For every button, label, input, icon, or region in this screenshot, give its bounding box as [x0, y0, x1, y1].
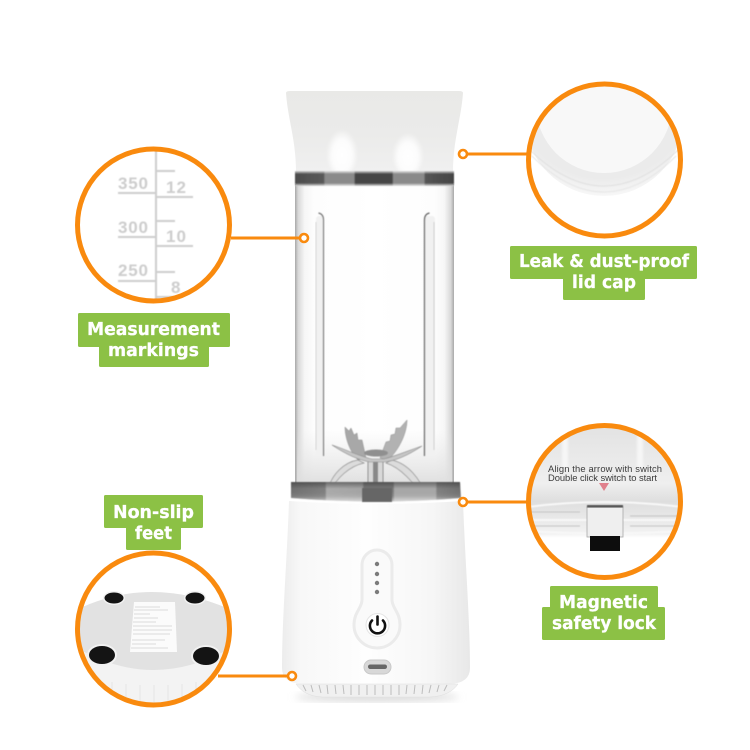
- control panel: [354, 550, 400, 648]
- label: measurement markings: Measurement: [87, 320, 220, 340]
- right jar rib: [424, 213, 435, 456]
- label: magnetic safety lock: Magnetic: [559, 593, 648, 613]
- blade assembly: [328, 420, 426, 496]
- measurement scale: 350: [118, 174, 148, 193]
- label: magnetic safety lock: [542, 586, 665, 640]
- foot bottom left: [88, 644, 117, 663]
- switch tile: [587, 507, 623, 537]
- battery dots: [375, 562, 379, 594]
- label: lid cap: Leak & dust-proof: [519, 252, 689, 272]
- measurement scale: 8: [171, 278, 180, 297]
- callout: lid cap circle: [526, 82, 683, 238]
- connector: feet: [218, 672, 296, 680]
- foot bottom right: [191, 645, 220, 664]
- lid: [286, 91, 463, 176]
- instruction text: Align the arrow with switch: [548, 463, 662, 474]
- measurement scale: 12: [166, 178, 186, 197]
- foot top right: [184, 591, 206, 605]
- label: non-slip feet: feet: [135, 524, 172, 544]
- measurement scale: 10: [166, 227, 186, 246]
- upper right blade: [380, 420, 407, 460]
- USB-C port: [364, 660, 391, 674]
- base: [282, 501, 470, 697]
- left jar rib: [316, 213, 324, 456]
- ridged foot: [296, 684, 458, 697]
- lid cap detail: [532, 125, 678, 195]
- lock detail photo: [531, 428, 678, 551]
- instruction text: [548, 466, 662, 481]
- callout: magnetic lock circle: [525, 423, 685, 581]
- blender product: [282, 91, 470, 702]
- measurement scale: [118, 148, 193, 300]
- bottom dark band: [291, 482, 461, 502]
- underside detail: [80, 591, 227, 702]
- callout: measurement markings circle: [78, 148, 230, 301]
- alignment arrow: [599, 483, 609, 491]
- jar: [295, 184, 454, 484]
- connector: lid cap: [459, 150, 527, 158]
- callout: non-slip feet circle: [70, 553, 236, 710]
- label: measurement markings: markings: [108, 341, 199, 361]
- lower right blade: [386, 460, 426, 496]
- shadow under blender: [295, 692, 459, 702]
- connector: measurement: [231, 234, 308, 242]
- label: measurement markings: [78, 313, 230, 367]
- label: non-slip feet: Non-slip: [113, 503, 194, 523]
- horizontal blade: [332, 445, 422, 462]
- label: lid cap: [510, 246, 697, 300]
- instruction text: Double click switch to start: [548, 472, 657, 483]
- measurement scale: 300: [118, 218, 148, 237]
- upper left blade: [345, 427, 366, 460]
- top dark band: [295, 171, 454, 186]
- lower left blade: [328, 460, 364, 491]
- label: magnetic safety lock: safety lock: [552, 614, 656, 634]
- connector: safety lock: [459, 498, 527, 506]
- foot top left: [103, 591, 125, 605]
- shaft: [368, 460, 383, 486]
- label: lid cap: lid cap: [572, 273, 636, 293]
- magnet block: [590, 536, 620, 551]
- power button: [366, 614, 389, 636]
- rating sticker: [130, 602, 177, 652]
- label: non-slip feet: [104, 495, 203, 550]
- measurement scale: 250: [118, 261, 148, 280]
